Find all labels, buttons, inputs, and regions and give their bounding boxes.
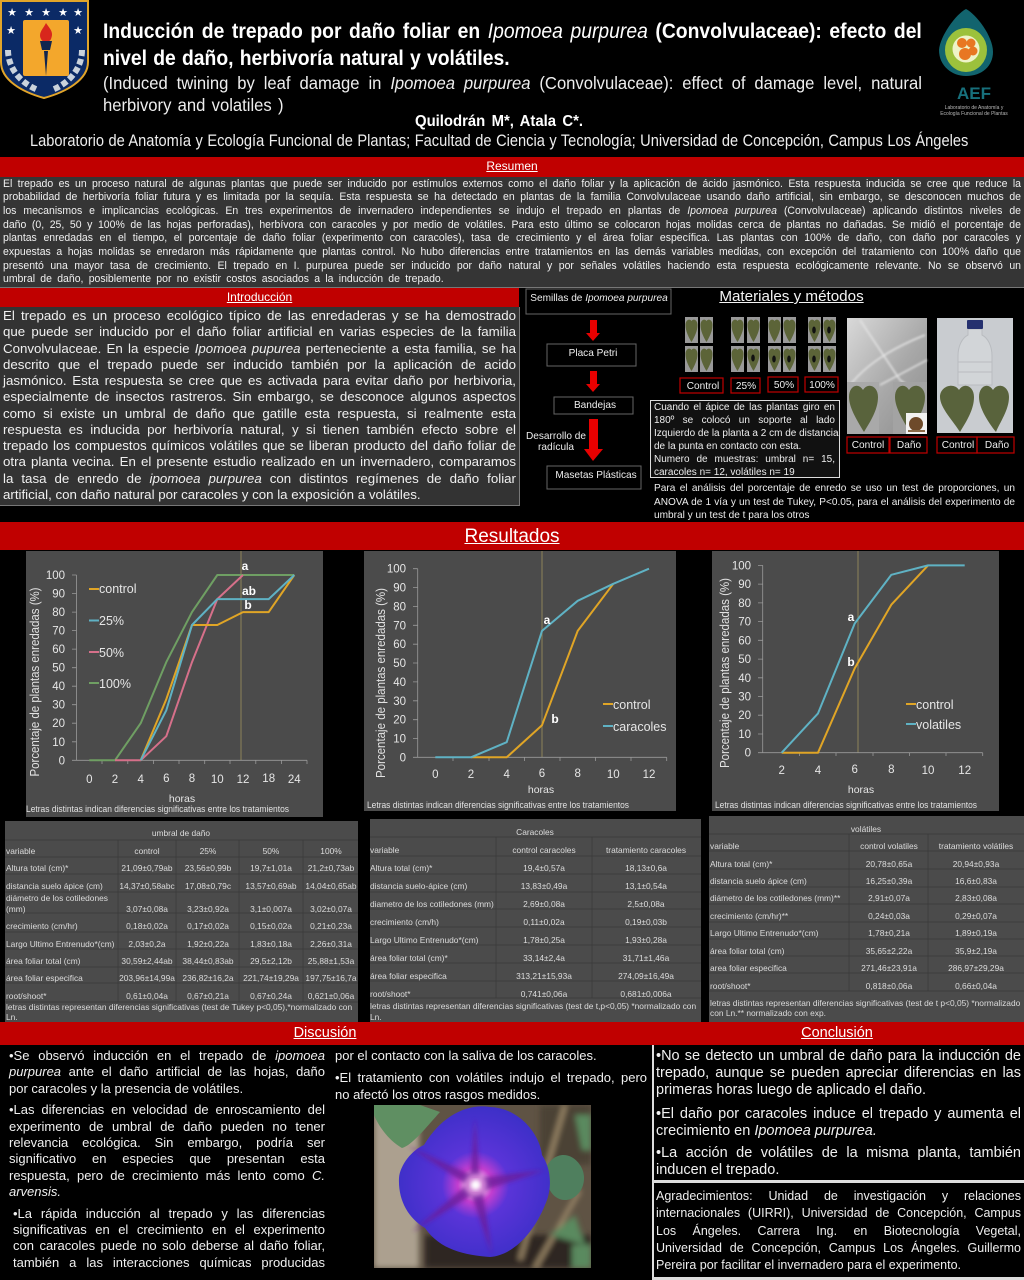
table: umbral de daño: área foliar total (cm) xyxy=(6,956,81,966)
table: volátiles: distancia suelo ápice (cm) xyxy=(710,876,807,886)
table: umbral de daño: 221,74±19,29a xyxy=(243,973,299,983)
panel: introduction xyxy=(0,307,520,506)
table: caracoles: 0,741±0,06a xyxy=(521,989,568,999)
panel: introduction: la tasa de enredo de ipomoea purpurea con distintos regímenes de daño foliar xyxy=(3,470,516,486)
line chart: volátiles: 60 xyxy=(738,635,751,647)
text: discussion column 2 xyxy=(335,1048,647,1102)
line chart: umbral de daño: 60 xyxy=(52,644,65,656)
panel: acknowledgements: Pereira por facilitar el invernadero para el experimento. xyxy=(656,1258,961,1272)
section header: Discusión xyxy=(0,1022,650,1045)
table: umbral de daño: umbral de daño xyxy=(152,828,210,838)
line chart: umbral de daño: ab xyxy=(242,584,256,598)
table: umbral de daño: 3,1±0,007a xyxy=(250,904,292,914)
table: umbral de daño: 3,23±0,92a xyxy=(187,904,229,914)
line chart: umbral de daño: 100% xyxy=(99,677,131,691)
section header: Resultados xyxy=(0,522,1024,550)
authors: Quilodrán M*, Atala C*. xyxy=(415,113,583,130)
table: umbral de daño: (mm) xyxy=(6,904,26,914)
table: caracoles: área foliar especifica xyxy=(370,971,447,981)
text: discussion column 1: •Se observó inducción en el trepado de ipomoea xyxy=(9,1048,325,1063)
section header: Conclusión xyxy=(650,1022,1024,1045)
section header: Conclusión: Conclusión xyxy=(801,1025,873,1041)
heading: Materiales y métodos: Materiales y métodos xyxy=(719,288,864,305)
logo: Universidad de Concepción shield: ★ xyxy=(58,7,68,19)
flow diagram: plant preparation: Bandejas xyxy=(574,400,616,411)
line chart: caracoles: 2 xyxy=(468,769,474,781)
panel: abstract: probabilidad de herbivoría foliar futura y es limitada por la sequía. Esta respuesta se ha detectado en plantas de la familia Convolvulaceae usando daño artificial, sin embargo, se desconocen muchos de xyxy=(3,191,1021,203)
table: umbral de daño: 50% xyxy=(263,846,280,856)
table: umbral de daño: Altura total (cm)* xyxy=(6,863,69,873)
line chart: umbral de daño: 20 xyxy=(52,718,65,730)
table: volátiles: 35,65±2,22a xyxy=(866,946,913,956)
table: caracoles: 2,5±0,08a xyxy=(627,899,665,909)
table: caracoles: 18,13±0,6a xyxy=(625,863,667,873)
panel: conclusions: •La acción de volátiles de la misma planta, también xyxy=(656,1145,1021,1161)
table: volátiles: 35,9±2,19a xyxy=(955,946,997,956)
photo: morning glory flower xyxy=(374,1105,591,1268)
table: volátiles: 286,97±29,29a xyxy=(948,963,1004,973)
table: caracoles: diametro de los cotiledones (mm) xyxy=(370,899,494,909)
text: discussion column 1: por caracoles y la presencia de volátiles. xyxy=(9,1081,243,1096)
panel: acknowledgements: Universidad de Concepción, Campus Los Ángeles. Guillermo xyxy=(656,1241,1021,1255)
line chart: umbral de daño: 50 xyxy=(52,663,65,675)
photo: volatiles experiment: Daño xyxy=(985,440,1009,451)
table: caracoles: distancia suelo-ápice (cm) xyxy=(370,881,467,891)
flow diagram: plant preparation: Desarrollo de xyxy=(526,431,586,442)
table: caracoles: 1,93±0,28a xyxy=(625,935,667,945)
panel: abstract: presentó una mayor tasa de crecimiento. El trepado en I. purpurea puede ser inducido por daño natural y por señales volátiles haciendo esta respuesta ecológicamente relevante. No se observó un xyxy=(3,260,1021,272)
flow diagram: plant preparation: Semillas de Ipomoea purpurea xyxy=(530,293,668,304)
section header: Resumen: Resumen xyxy=(486,159,538,173)
flow diagram: plant preparation: Masetas Plásticas xyxy=(555,470,637,481)
table: caracoles: variable xyxy=(370,845,400,855)
text: discussion column 2: •El tratamiento con volátiles indujo el trepado, pero xyxy=(335,1070,647,1085)
line chart: umbral de daño: horas xyxy=(169,793,195,805)
table: umbral de daño: 203,96±14,99a xyxy=(119,973,175,983)
text: discussion column 1: significativas en el crecimiento en el experimento xyxy=(13,1222,325,1237)
line chart: caracoles: control xyxy=(613,698,651,712)
text: discussion column 1: respuesta, pero de crecimiento más lento como C. xyxy=(9,1168,325,1183)
line chart: volátiles: 50 xyxy=(738,654,751,666)
table: volátiles: 0,66±0,04a xyxy=(955,981,997,991)
line chart: volátiles: 100 xyxy=(732,560,751,572)
panel: abstract: umbral de daño, posiblemente por no existir costos asociados a la inducción de trepado. xyxy=(3,273,444,285)
table: umbral de daño: crecimiento (cm/hr) xyxy=(6,921,78,931)
panel: acknowledgements: Agradecimientos: Unidad de investigación y relaciones xyxy=(656,1189,1021,1203)
logo: AEF laboratory: Laboratorio de Anatomía y xyxy=(945,105,1004,111)
panel: introduction: respuesta es inducida por herbivoría natural, y si tienen también efecto sobre el xyxy=(3,422,516,437)
logo: Universidad de Concepción shield: ★ xyxy=(73,25,83,37)
title block: nivel de daño, herbivoría natural y volátiles. xyxy=(103,47,510,70)
table: umbral de daño: 3,02±0,07a xyxy=(310,904,352,914)
line chart: volátiles: 0 xyxy=(745,748,751,760)
table: caracoles: 2,69±0,08a xyxy=(523,899,565,909)
table: umbral de daño: 14,04±0,65ab xyxy=(305,881,357,891)
table: volátiles: Largo Ultimo Entrenudo*(cm) xyxy=(710,928,819,938)
table: umbral de daño: 2,03±0,2a xyxy=(128,939,166,949)
panel: abstract: plantas enredadas en el tiempo, el porcentaje de daño foliar (experimento con caracoles), tasa de crecimiento y el área foliar específica. Las plantas con 100% de daño, con daño por caracoles y xyxy=(3,232,1021,244)
callout: support and sample sizes: Izquierdo de la planta a 2 cm de distancia xyxy=(654,428,839,439)
panel: introduction: El trepado es un proceso ecológico típico de las enredaderas y se ha demostrado xyxy=(3,308,516,323)
table: caracoles: 0,19±0,03b xyxy=(625,917,667,927)
panel: conclusions: •No se detecto un umbral de daño para la inducción de xyxy=(656,1048,1021,1064)
panel: introduction: artificial, con daño natural por caracoles y con la exposición a volátiles. xyxy=(3,487,421,502)
panel: conclusions: primeras horas luego de aplicado el daño. xyxy=(656,1082,926,1098)
line chart: caracoles: 70 xyxy=(393,620,406,632)
flow diagram: plant preparation: Placa Petri xyxy=(569,348,617,359)
line chart: volátiles: horas xyxy=(848,784,874,796)
line chart: volátiles: volatiles xyxy=(916,718,961,732)
line chart: umbral de daño: 0 xyxy=(86,774,93,786)
line chart: caracoles: 0 xyxy=(400,752,406,764)
logo: AEF laboratory: Ecología Funcional de Plantas xyxy=(940,111,1008,117)
table: caracoles: 0,681±0,006a xyxy=(620,989,672,999)
table: umbral de daño: 21,2±0,73ab xyxy=(308,863,355,873)
logo: Universidad de Concepción shield xyxy=(0,0,89,99)
logo: AEF laboratory xyxy=(939,9,1008,117)
line chart: caracoles: 8 xyxy=(574,768,581,780)
line chart: volátiles: a xyxy=(848,610,855,624)
line chart: caracoles: b xyxy=(551,712,559,726)
table: umbral de daño: 0,67±0,24a xyxy=(250,991,292,1001)
table: volátiles: area foliar especifica xyxy=(710,963,787,973)
table: volátiles: área foliar total (cm) xyxy=(710,946,785,956)
line chart: caracoles: a xyxy=(544,613,551,627)
section header: Discusión: Discusión xyxy=(294,1025,356,1041)
table: volátiles: 16,25±0,39a xyxy=(866,876,913,886)
line chart: volátiles: 10 xyxy=(922,765,934,777)
table: umbral de daño: 23,56±0,99b xyxy=(185,863,232,873)
line chart: volátiles: 10 xyxy=(738,729,751,741)
line chart: caracoles: 50 xyxy=(393,658,406,670)
table: caracoles: crecimiento (cm/h) xyxy=(370,917,439,927)
table: volátiles: Altura total (cm)* xyxy=(710,859,773,869)
panel: abstract: El trepado es un proceso natural de algunas plantas que puede ser inducido por estímulos externos como el daño foliar y la aplicación de ácido jasmónico. Esta respuesta inducida se cree que reduce la xyxy=(3,178,1021,190)
line chart: volátiles: control xyxy=(916,698,954,712)
table: umbral de daño: 25,88±1,53a xyxy=(308,956,355,966)
table: umbral de daño: 21,09±0,79ab xyxy=(121,863,173,873)
table: caracoles: 274,09±16,49a xyxy=(618,971,674,981)
section header: Introducción xyxy=(0,288,519,307)
table: umbral de daño: 0,621±0,06a xyxy=(308,991,355,1001)
panel: abstract: daño (0, 25, 50 y 100% de las hojas perforadas), herbívora con caracoles y por medio de volátiles. Para esto último se colocaron hojas molidas cerca de plantas no dañadas. Se midió el porcentaje de xyxy=(3,219,1021,231)
table: volátiles: crecimiento (cm/hr)** xyxy=(710,911,789,921)
table: umbral de daño: 236,82±16,2a xyxy=(182,973,234,983)
callout: support and sample sizes: Cuando el ápice de las plantas giro en xyxy=(654,402,835,413)
line chart: umbral de daño: 40 xyxy=(52,681,65,693)
table: umbral de daño: root/shoot* xyxy=(6,991,47,1001)
table: caracoles: root/shoot* xyxy=(370,989,411,999)
panel: acknowledgements: internacionales (UIRRI), Universidad de Concepción, Campus xyxy=(656,1206,1021,1220)
line chart: umbral de daño: 10 xyxy=(211,774,224,786)
panel: abstract xyxy=(0,177,1024,288)
table: caracoles: 31,71±1,46a xyxy=(623,953,670,963)
title block: Inducción de trepado por daño foliar en Ipomoea purpurea (Convolvulaceae): efecto del xyxy=(103,20,922,43)
text: discussion column 2: no afectó los otros rasgos medidos. xyxy=(335,1087,540,1102)
table: umbral de daño: 1,83±0,18a xyxy=(250,939,292,949)
title block: (Induced twining by leaf damage in Ipomoea purpurea (Convolvulaceae): effect of damage level, natural xyxy=(103,73,922,93)
table: caracoles: tratamiento caracoles xyxy=(606,845,686,855)
table: caracoles: 13,1±0,54a xyxy=(625,881,667,891)
line chart: volátiles: 20 xyxy=(738,710,751,722)
line chart: umbral de daño: 100 xyxy=(46,570,65,582)
line chart: umbral de daño: 30 xyxy=(52,700,65,712)
table: volátiles: 0,24±0,03a xyxy=(868,911,910,921)
logo: Universidad de Concepción shield: ★ xyxy=(6,25,16,37)
table: caracoles: 33,14±2,4a xyxy=(523,953,565,963)
table: caracoles: letras distintas representan diferencias significativas (test de t,p<0,05) *normalizado con xyxy=(370,1001,696,1011)
table: volátiles: 20,94±0,93a xyxy=(953,859,1000,869)
panel: introduction: especialmente de insectos rastreros. Sin embargo, se desconoce algunos aspectos xyxy=(3,389,516,404)
line chart: volátiles: 90 xyxy=(738,579,751,591)
table: caracoles: Caracoles xyxy=(516,827,554,837)
table: umbral de daño: 17,08±0,79c xyxy=(185,881,231,891)
table: umbral de daño: 2,26±0,31a xyxy=(310,939,352,949)
line chart: umbral de daño: 80 xyxy=(52,607,65,619)
photo: volatiles experiment: Control xyxy=(942,440,974,451)
title block xyxy=(103,20,922,115)
leaf damage treatments: 25% xyxy=(736,381,756,392)
line chart: caracoles: 30 xyxy=(393,696,406,708)
line chart: caracoles: 4 xyxy=(503,769,510,781)
logo: Universidad de Concepción shield: ★ xyxy=(24,7,34,19)
line chart: umbral de daño: Letras distintas indican diferencias significativas entre los tratamientos xyxy=(26,804,289,814)
table: umbral de daño: Ln. xyxy=(6,1012,18,1022)
table: umbral de daño: 30,59±2,44ab xyxy=(121,956,173,966)
callout: support and sample sizes: de la punta en contacto con esta. xyxy=(654,441,801,452)
text: statistical analysis: ANOVA de 1 vía y un test de Tukey, P<0.05, para el análisis del experimento de xyxy=(654,496,1015,508)
text: statistical analysis: Para el análisis del porcentaje de enredo se uso un test de proporciones, un xyxy=(654,483,1015,494)
line chart: umbral de daño: 10 xyxy=(52,737,65,749)
table: volátiles: variable xyxy=(710,841,740,851)
line chart: caracoles: 100 xyxy=(387,564,406,576)
line chart: volátiles: 4 xyxy=(815,765,822,777)
callout: support and sample sizes: 180º se colocó un soporte al lado xyxy=(654,415,835,426)
table: umbral de daño: 19,7±1,01a xyxy=(250,863,292,873)
logo: Universidad de Concepción shield: ★ xyxy=(73,7,83,19)
line chart: volátiles: 12 xyxy=(958,765,971,777)
leaf damage treatments: Control xyxy=(687,381,719,392)
callout: support and sample sizes xyxy=(650,400,840,478)
panel: conclusions: •El daño por caracoles induce el trepado y aumenta el xyxy=(656,1106,1021,1122)
table: caracoles: 0,11±0,02a xyxy=(523,917,565,927)
section header: Introducción: Introducción xyxy=(227,290,292,304)
text: discussion column 1: purpurea ante el daño artificial de las hojas, daño xyxy=(9,1064,325,1079)
line chart: caracoles: 20 xyxy=(393,715,406,727)
panel: introduction: otra planta vecina. En el presente estudio realizado en un invernadero, comparamos xyxy=(3,454,516,469)
line chart: caracoles: 10 xyxy=(393,733,406,745)
table: caracoles: Ln. xyxy=(370,1012,382,1022)
table: umbral de daño: 3,07±0,08a xyxy=(126,904,168,914)
table: volátiles: tratamiento volátiles xyxy=(939,841,1013,851)
line chart: umbral de daño: 70 xyxy=(52,626,65,638)
table: umbral de daño: 0,17±0,02a xyxy=(187,921,229,931)
table: umbral de daño: 29,5±2,12b xyxy=(250,956,292,966)
text: discussion column 2: por el contacto con la saliva de los caracoles. xyxy=(335,1048,597,1063)
line chart: volátiles: 70 xyxy=(738,617,751,629)
table: umbral de daño: 0,61±0,04a xyxy=(126,991,168,1001)
table: caracoles: Largo Ultimo Entrenudo*(cm) xyxy=(370,935,479,945)
panel: conclusions: crecimiento en Ipomoea purpurea. xyxy=(656,1123,877,1139)
line chart: caracoles: Letras distintas indican diferencias significativas entre los tratamientos xyxy=(367,800,629,810)
text: discussion column 1: relevancia ecológica. Sin embargo, podría ser xyxy=(9,1135,325,1150)
line chart: umbral de daño: 12 xyxy=(237,774,249,786)
line chart: umbral de daño: 4 xyxy=(137,774,144,786)
table: volátiles: 2,91±0,07a xyxy=(868,893,910,903)
line chart: caracoles: 40 xyxy=(393,677,406,689)
line chart: caracoles: Porcentaje de plantas enredadas (%) xyxy=(374,588,388,778)
table: umbral de daño: 0,18±0,02a xyxy=(126,921,168,931)
line chart: umbral de daño: 0 xyxy=(59,755,65,767)
table: umbral de daño: 0,67±0,21a xyxy=(187,991,229,1001)
line chart: umbral de daño: control xyxy=(99,582,137,596)
table: umbral de daño: control xyxy=(134,846,160,856)
text: discussion column 1: significativo en especies que presentan esta xyxy=(9,1151,325,1166)
line chart: volátiles: 80 xyxy=(738,598,751,610)
table: umbral de daño: Largo Ultimo Entrenudo*(cm) xyxy=(6,939,115,949)
table: volátiles: 16,6±0,83a xyxy=(955,876,997,886)
line chart: umbral de daño: Porcentaje de plantas enredadas (%) xyxy=(28,588,42,776)
panel: conclusions: inducen el trepado. xyxy=(656,1162,779,1178)
leaf damage treatments: 50% xyxy=(774,380,794,391)
table: umbral de daño: variable xyxy=(6,846,36,856)
flow diagram: plant preparation: radícula xyxy=(538,442,574,453)
panel: introduction: que puede ser inducido por el daño foliar artificial en varias especies de la familia xyxy=(3,324,516,339)
line chart: caracoles: 80 xyxy=(393,601,406,613)
line chart: umbral de daño: b xyxy=(244,598,252,612)
panel: acknowledgements xyxy=(652,1183,1024,1280)
table: volátiles: control volatiles xyxy=(860,841,918,851)
line chart: umbral de daño: 90 xyxy=(52,588,65,600)
table: umbral de daño: 100% xyxy=(320,846,342,856)
text: statistical analysis: umbral y un test de t para los otros xyxy=(654,510,809,521)
table: caracoles: área foliar total (cm)* xyxy=(370,953,448,963)
table: caracoles: 1,78±0,25a xyxy=(523,935,565,945)
panel: conclusions xyxy=(652,1045,1024,1183)
line chart: volátiles: 40 xyxy=(738,673,751,685)
text: discussion column 1: arvensis. xyxy=(9,1184,61,1199)
line chart: umbral de daño: 2 xyxy=(112,774,118,786)
text: discussion column 1: •La rápida inducción al trepado y las diferencias xyxy=(13,1206,325,1221)
logo: Universidad de Concepción shield: ★ xyxy=(41,7,51,19)
table: volátiles: volátiles xyxy=(851,824,881,834)
table: caracoles: control caracoles xyxy=(512,845,576,855)
section header: Resumen xyxy=(0,157,1024,177)
table: volátiles: letras distintas representan diferencias significativas (test de t p<0,05) *normalizado xyxy=(710,998,1021,1008)
panel: introduction: como si existe un umbral de daño que gatille esta respuesta, si realmente esta xyxy=(3,406,516,420)
line chart: volátiles: 30 xyxy=(738,692,751,704)
table: volátiles: 0,29±0,07a xyxy=(955,911,997,921)
line chart: umbral de daño: 24 xyxy=(288,774,301,786)
table: umbral de daño: 0,21±0,23a xyxy=(310,921,352,931)
line chart: caracoles: 12 xyxy=(643,769,655,781)
table: umbral de daño: 14,37±0,58abc xyxy=(119,881,175,891)
table: umbral de daño: área foliar especifica xyxy=(6,973,83,983)
panel: acknowledgements: Los Ángeles. Carrera Ing. en Biotecnología Vegetal, xyxy=(656,1224,1021,1238)
line chart: caracoles: 90 xyxy=(393,583,406,595)
line chart: umbral de daño: 50% xyxy=(99,646,124,660)
table: umbral de daño: distancia suelo ápice (cm) xyxy=(6,881,103,891)
title block: herbivory and volatiles ) xyxy=(103,95,284,115)
table: volátiles: 20,78±0,65a xyxy=(866,859,913,869)
table: caracoles: 313,21±15,93a xyxy=(516,971,572,981)
line chart: volátiles: b xyxy=(847,655,855,669)
line chart: caracoles: 0 xyxy=(432,769,439,781)
table: umbral de daño: 13,57±0,69ab xyxy=(245,881,297,891)
line chart: caracoles: 60 xyxy=(393,639,406,651)
text: discussion column 1: •Las diferencias en velocidad de enroscamiento del xyxy=(9,1102,325,1117)
panel: introduction: jasmónico. Esta respuesta se cree que es activada para evitar daño por herbivoria, xyxy=(3,373,516,388)
table: volátiles: con Ln.** normalizado con exp. xyxy=(710,1008,826,1018)
text: discussion column 1 xyxy=(8,1048,325,1270)
table: umbral de daño: diámetro de los cotiledones xyxy=(6,893,108,903)
logo: AEF laboratory: AEF xyxy=(957,84,991,103)
line chart: caracoles: horas xyxy=(528,784,554,796)
text: discussion column 1: también a las interacciones químicas producidas xyxy=(13,1255,325,1270)
table: volátiles: root/shoot* xyxy=(710,981,751,991)
line chart: volátiles: 2 xyxy=(778,765,785,777)
text: discussion column 1: con caracoles puede no solo deberse al daño foliar, xyxy=(13,1238,325,1253)
table: volátiles: 0,818±0,06a xyxy=(866,981,913,991)
line chart: umbral de daño: 8 xyxy=(189,773,195,785)
affiliation: Laboratorio de Anatomía y Ecología Funcional de Plantas; Facultad de Ciencia y Tecnología; Universidad de Concepción, Campus Los Ángeles xyxy=(30,131,968,150)
table: volátiles: diámetro de los cotiledones (mm)** xyxy=(710,893,841,903)
line chart: caracoles: 6 xyxy=(539,768,545,780)
table: umbral de daño: 38,44±0,83ab xyxy=(182,956,234,966)
line chart: volátiles: 8 xyxy=(888,764,895,776)
logo: Universidad de Concepción shield: ★ xyxy=(7,7,17,19)
table: volátiles: 2,83±0,08a xyxy=(955,893,997,903)
panel: introduction: descrito que el trepado puede ser inducido también por la aplicación de acido xyxy=(3,357,516,372)
table: caracoles: Altura total (cm)* xyxy=(370,863,433,873)
panel: abstract: los mecanismos e implicancias ecológicas. En tres experimentos de invernadero independientes se indujo el trepado en plantas de Ipomoea purpurea (Convolvulaceae) aplicando distintos niveles de xyxy=(3,205,1021,217)
table: umbral de daño: 197,75±16,7a xyxy=(305,973,357,983)
panel: abstract: expuestas a hojas molidas se enredaron más rápidamente que plantas control. No hubo diferencias entre tratamientos en las demás variables medidas, con excepción del tratamiento con 100% daño que xyxy=(3,246,1021,258)
callout: support and sample sizes: caracoles n= 12, volátiles n= 19 xyxy=(654,467,795,478)
table: volátiles: 271,46±23,91a xyxy=(861,963,917,973)
line chart: umbral de daño: 6 xyxy=(163,773,170,785)
text: discussion column 1: experimento de umbral de daño pueden no tener xyxy=(9,1119,325,1134)
leaf damage treatments: 100% xyxy=(809,380,835,391)
section header: Resultados: Resultados xyxy=(464,526,560,547)
line chart: umbral de daño: a xyxy=(242,559,249,573)
table: umbral de daño: letras distintas representan diferencias significativas (test de Tukey p<0,05),*normalizado con xyxy=(6,1002,352,1012)
line chart: volátiles: Porcentaje de plantas enredadas (%) xyxy=(718,578,732,768)
photo: snail damage experiment: Control xyxy=(852,440,884,451)
line chart: umbral de daño: 25% xyxy=(99,614,124,628)
table: caracoles: 13,83±0,49a xyxy=(521,881,568,891)
line chart: volátiles: 6 xyxy=(851,764,858,776)
panel: introduction: trepado los compuestos químicos volátiles que se liberan producto del daño foliar de xyxy=(3,438,516,453)
table: caracoles: 19,4±0,57a xyxy=(523,863,565,873)
table: umbral de daño: 25% xyxy=(200,846,217,856)
table: volátiles: 1,89±0,19a xyxy=(955,928,997,938)
table: umbral de daño: 1,92±0,22a xyxy=(187,939,229,949)
line chart: volátiles: Letras distintas indican diferencias significativas entre los tratamientos xyxy=(715,800,977,810)
text: statistical analysis xyxy=(654,483,1015,521)
line chart: caracoles: 10 xyxy=(607,769,620,781)
line chart: caracoles: caracoles xyxy=(613,720,666,734)
table: volátiles: 1,78±0,21a xyxy=(868,928,910,938)
photo: snail damage experiment: Daño xyxy=(897,440,921,451)
panel: introduction: Convolvulaceae. En la especie Ipomoea pupurea perteneciente a esta familia, se ha xyxy=(3,340,516,356)
callout: support and sample sizes: Numero de muestras: umbral n= 15, xyxy=(654,454,835,465)
table: umbral de daño: 0,15±0,02a xyxy=(250,921,292,931)
panel: conclusions: trepado, aunque se pueden apreciar diferencias en las xyxy=(656,1065,1021,1081)
line chart: umbral de daño: 18 xyxy=(262,773,275,785)
